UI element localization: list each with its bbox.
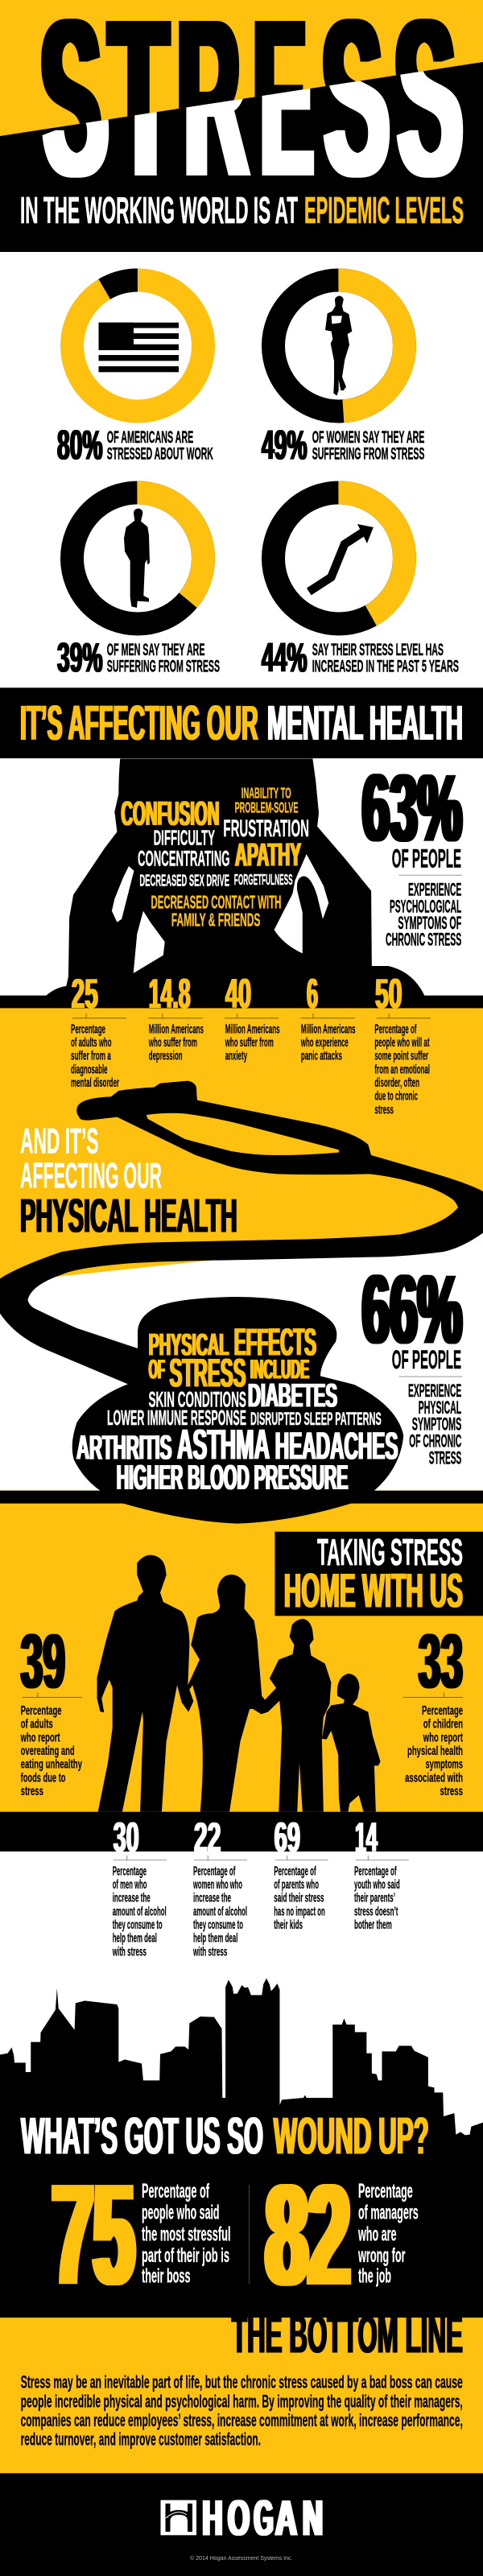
stat: 40 anxiety: who suffer from <box>225 1036 274 1050</box>
silhouette: city skyline <box>0 1978 483 2318</box>
word cloud: physical effects: ASTHMA <box>177 1422 270 1469</box>
stat: 14 youth: Percentage of <box>354 1864 397 1878</box>
stat: 80%: OF AMERICANS ARE <box>107 427 193 447</box>
header panel <box>0 0 483 252</box>
heading: and it's affecting our physical health <box>20 1121 237 1243</box>
stat: 40 anxiety: 40 <box>225 971 251 1018</box>
stat: 50 emotional disorder: due to chronic <box>374 1090 418 1104</box>
stat: 14 youth: 14 <box>355 1814 378 1861</box>
logo wordmark: A <box>275 2490 297 2546</box>
word cloud: physical effects: ARTHRITIS <box>76 1429 172 1468</box>
stat: 25 percent diagnosable: of adults who <box>71 1036 111 1050</box>
stat: 80%: 80% <box>57 422 103 469</box>
stat: 22 women alcohol: help them deal <box>193 1932 237 1946</box>
stat: 39 overeating: 39 <box>21 1619 65 1705</box>
word cloud: psychological symptoms: CONCENTRATING <box>138 846 230 870</box>
stat: 75 boss: 75 <box>52 2153 134 2314</box>
stat: 40 anxiety <box>225 971 280 1063</box>
word cloud: psychological symptoms: APATHY <box>235 836 301 873</box>
stat: 50 emotional disorder: from an emotional <box>374 1063 430 1076</box>
stat: 82 managers: who are <box>357 2223 397 2245</box>
icon: man silhouette <box>124 509 150 608</box>
stat: 40 anxiety: Million Americans <box>225 1022 280 1037</box>
stat: 39 overeating: foods due to <box>21 1771 66 1785</box>
word cloud: physical effects: INCLUDE <box>250 1354 309 1385</box>
stat: 25 percent diagnosable: 25 <box>72 971 98 1018</box>
text: STRESSED ABOUT WORK <box>107 444 213 464</box>
stat: 75 boss: people who said <box>142 2202 219 2224</box>
stat: 39% <box>57 634 220 681</box>
stat: 69 parents: has no impact on <box>274 1905 325 1918</box>
stat: 50 emotional disorder: Percentage of <box>374 1022 417 1037</box>
divider <box>248 2185 250 2284</box>
stat: 22 women alcohol: Percentage of <box>193 1864 236 1878</box>
footer panel <box>0 2473 483 2576</box>
stat: 22 women alcohol: with stress <box>192 1945 227 1959</box>
title: STRESS <box>41 19 464 178</box>
stat: 25 percent diagnosable <box>71 971 126 1090</box>
stat: 6 panic attacks: who experience <box>300 1036 349 1050</box>
word cloud: psychological symptoms: INABILITY TO <box>242 785 291 802</box>
stat: 39 overeating: who report <box>20 1731 60 1744</box>
heading: and it's affecting our physical health: AND IT’S <box>20 1121 98 1161</box>
stat: 14.8 depression: depression <box>149 1050 182 1063</box>
stat: 30 men alcohol: Percentage <box>113 1864 147 1878</box>
stat: 22 women alcohol: amount of alcohol <box>193 1905 247 1918</box>
stat: 30 men alcohol: increase the <box>113 1892 151 1905</box>
stat: 39%: OF MEN SAY THEY ARE <box>107 640 204 659</box>
stat: 39%: 39% <box>57 634 103 681</box>
stat: 22 women alcohol: they consume to <box>193 1918 243 1932</box>
stat: 25 percent diagnosable: suffer from a <box>71 1050 111 1063</box>
body text <box>21 2372 463 2450</box>
word cloud: physical effects: DIABETES <box>248 1376 337 1414</box>
logo wordmark: O <box>228 2490 250 2546</box>
word cloud: physical effects: STRESS <box>169 1351 246 1396</box>
stat: 6 panic attacks <box>300 971 356 1063</box>
icon: woman silhouette <box>325 295 352 396</box>
stat: 39 overeating: stress <box>21 1785 43 1798</box>
stat: 50 emotional disorder: stress <box>374 1103 394 1117</box>
stat: 44%: 44% <box>262 634 308 681</box>
stat: 39 overeating: eating unhealthy <box>21 1758 82 1772</box>
stat: 69 parents <box>274 1814 328 1932</box>
word cloud: psychological symptoms: DIFFICULTY <box>154 825 215 849</box>
word cloud: psychological symptoms: FORGETFULNESS <box>234 872 293 888</box>
stat: 69 parents: their kids <box>274 1918 303 1932</box>
stat: 33 children symptoms <box>403 1619 463 1798</box>
copyright: © 2014 Hogan Assessment Systems Inc. <box>190 2554 293 2562</box>
icon: flag <box>98 323 179 372</box>
stat: 39 overeating: Percentage <box>21 1704 62 1718</box>
stat: 50 emotional disorder: 50 <box>375 971 402 1018</box>
stat: 30 men alcohol: amount of alcohol <box>113 1905 167 1918</box>
stat: 50 emotional disorder: disorder, often <box>374 1076 419 1090</box>
stat: 75 boss: the most stressful <box>142 2223 231 2245</box>
stat: 30 men alcohol: with stress <box>112 1945 147 1959</box>
stat: 30 men alcohol: 30 <box>114 1814 139 1861</box>
panel: the bottom line <box>0 2305 483 2473</box>
stat: 69 parents: Percentage of <box>274 1864 316 1878</box>
stat: 30 men alcohol: of men who <box>113 1878 147 1892</box>
stat: 50 emotional disorder: some point suffer <box>374 1050 428 1063</box>
stat: 14 youth: bother them <box>354 1918 392 1932</box>
word cloud: psychological symptoms: FAMILY & FRIENDS <box>171 910 260 931</box>
heading: and it's affecting our physical health: AFFECTING OUR <box>20 1157 162 1196</box>
stat: 39 overeating <box>20 1619 82 1798</box>
stat: 63% of people <box>362 754 462 950</box>
word cloud: physical effects: PHYSICAL <box>149 1327 229 1362</box>
stat: 14 youth <box>354 1814 409 1932</box>
word cloud: physical effects: SKIN CONDITIONS <box>148 1387 246 1411</box>
stat: 14 youth: youth who said <box>354 1878 400 1892</box>
stat: 22 women alcohol <box>192 1814 247 1959</box>
word cloud: physical effects: EFFECTS <box>234 1321 316 1364</box>
icon: rising arrow <box>309 524 374 592</box>
word cloud: psychological symptoms: CONFUSION <box>121 795 219 833</box>
stat: 82 managers: 82 <box>266 2154 350 2315</box>
stat: 25 percent diagnosable: Percentage <box>71 1022 105 1037</box>
stat: 39 overeating: overeating and <box>21 1744 75 1758</box>
stat: 22 women alcohol: 22 <box>194 1814 221 1861</box>
stat: 25 percent diagnosable: mental disorder <box>71 1076 119 1090</box>
stat: 69 parents: said their stress <box>274 1892 324 1905</box>
text: PHYSICAL HEALTH <box>20 1190 237 1243</box>
stat: 6 panic attacks: Million Americans <box>301 1022 356 1037</box>
stat: 66% of people <box>362 1254 462 1468</box>
stat: 49% <box>262 422 424 469</box>
word cloud: psychological symptoms: DECREASED SEX DRIVE <box>139 872 229 890</box>
stat: 50 emotional disorder: people who will at <box>374 1036 430 1050</box>
silhouette: head in hands <box>0 758 483 1008</box>
stat: 30 men alcohol: help them deal <box>113 1932 157 1946</box>
stat: 14.8 depression: 14.8 <box>149 971 190 1018</box>
word cloud: psychological symptoms: PROBLEM-SOLVE <box>235 799 298 815</box>
stat: 6 panic attacks: panic attacks <box>301 1050 342 1063</box>
stat: 14 youth: stress doesn’t <box>354 1905 398 1918</box>
word cloud: physical effects: OF <box>149 1354 165 1385</box>
word cloud: physical effects <box>76 1321 398 1497</box>
stat: 80% <box>57 422 213 469</box>
stat: 30 men alcohol <box>112 1814 167 1959</box>
logo wordmark: G <box>254 2490 274 2546</box>
stat: 6 panic attacks: 6 <box>307 971 318 1018</box>
stat: 75 boss: Percentage of <box>142 2180 209 2202</box>
word cloud: physical effects: LOWER IMMUNE RESPONSE <box>107 1406 246 1430</box>
stat: 69 parents: 69 <box>275 1814 300 1861</box>
stat: 75 boss: their boss <box>142 2265 190 2288</box>
donut: 44% stress increased <box>274 493 404 624</box>
stat: 22 women alcohol: increase the <box>193 1892 231 1905</box>
logo mark <box>161 2500 196 2535</box>
word cloud: psychological symptoms: FRUSTRATION <box>223 815 309 842</box>
stethoscope with physical effects blob <box>0 1081 483 1524</box>
word cloud: psychological symptoms: DECREASED CONTACT WITH <box>151 891 281 912</box>
stat: 14 youth: their parents’ <box>354 1892 395 1905</box>
stat: 82 managers: wrong for <box>357 2244 406 2267</box>
stat: 14.8 depression: who suffer from <box>148 1036 197 1050</box>
body text: reduce turnover, and improve customer satisfaction. <box>21 2429 261 2450</box>
stat: 22 women alcohol: women who who <box>193 1878 242 1892</box>
stat: 69 parents: of parents who <box>274 1878 319 1892</box>
black band <box>0 1812 483 1852</box>
stat: 82 managers: the job <box>358 2265 391 2288</box>
donut: 49% of women <box>274 280 404 411</box>
stat: 50 emotional disorder <box>374 971 431 1117</box>
stat: 82 managers: Percentage <box>358 2180 413 2202</box>
stat: 49%: 49% <box>262 422 308 469</box>
text: SUFFERING FROM STRESS <box>107 657 220 676</box>
stat: 14.8 depression: Million Americans <box>149 1022 204 1037</box>
word cloud: psychological symptoms <box>121 785 309 931</box>
logo wordmark <box>203 2490 323 2546</box>
stat: 75 boss: part of their job is <box>142 2244 229 2267</box>
stat: 30 men alcohol: they consume to <box>113 1918 163 1932</box>
logo wordmark: N <box>303 2490 323 2546</box>
heading box: taking stress home with us <box>275 1531 483 1618</box>
donut: 39% of men <box>72 493 203 624</box>
donut: 80% of Americans <box>48 256 227 436</box>
stat: 33 children symptoms: stress <box>440 1785 463 1798</box>
stat: 39 overeating: of adults <box>21 1718 53 1732</box>
stat: 25 percent diagnosable: diagnosable <box>71 1063 108 1076</box>
silhouette: family <box>97 1555 381 1812</box>
yellow background: health and family sections <box>0 1008 483 1813</box>
stat: 14.8 depression <box>148 971 204 1063</box>
logo wordmark: H <box>203 2490 222 2546</box>
stat: 44% <box>262 634 459 681</box>
stat: 40 anxiety: anxiety <box>225 1050 247 1063</box>
stat: 82 managers: of managers <box>358 2202 419 2224</box>
